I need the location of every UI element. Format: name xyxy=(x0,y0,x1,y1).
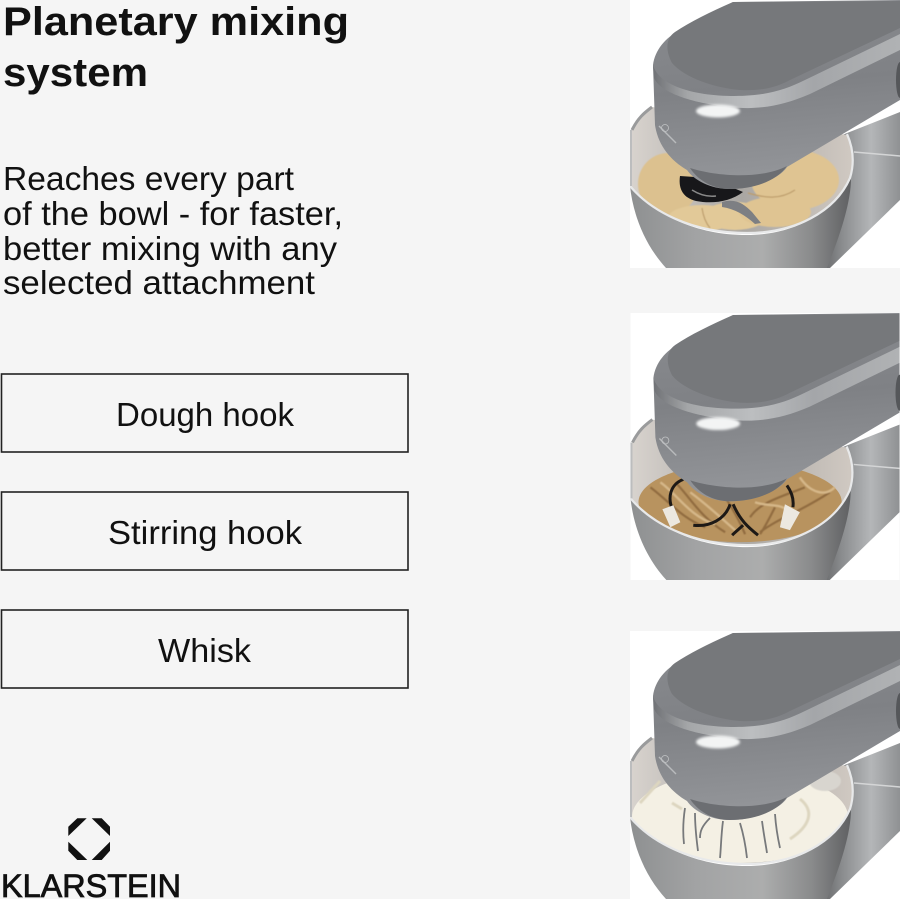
button: dough hook: Dough hook xyxy=(116,396,294,433)
photo: mixer with stirring hook xyxy=(630,313,900,580)
creamed batter xyxy=(638,462,842,542)
button: stirring hook: Stirring hook xyxy=(108,514,303,551)
button: stirring hook xyxy=(2,492,408,570)
button: whisk xyxy=(2,610,408,688)
title: system xyxy=(3,51,148,95)
button: whisk: Whisk xyxy=(158,632,252,669)
description text: Reaches every part xyxy=(3,161,295,198)
dough xyxy=(638,150,839,231)
description text: better mixing with any xyxy=(3,231,337,268)
title xyxy=(3,0,349,95)
photo: mixer with dough hook xyxy=(630,0,900,268)
dough hook xyxy=(680,176,761,224)
title: Planetary mixing xyxy=(3,0,349,44)
logo: Klarstein xyxy=(1,818,181,899)
description text: selected attachment xyxy=(3,265,316,302)
button: dough hook xyxy=(2,374,408,452)
stirring hook xyxy=(662,479,800,535)
description text: of the bowl - for faster, xyxy=(3,196,343,233)
whisk xyxy=(683,808,780,858)
description text xyxy=(3,161,343,302)
photo: mixer with whisk xyxy=(630,631,900,899)
whipped cream xyxy=(632,771,848,863)
